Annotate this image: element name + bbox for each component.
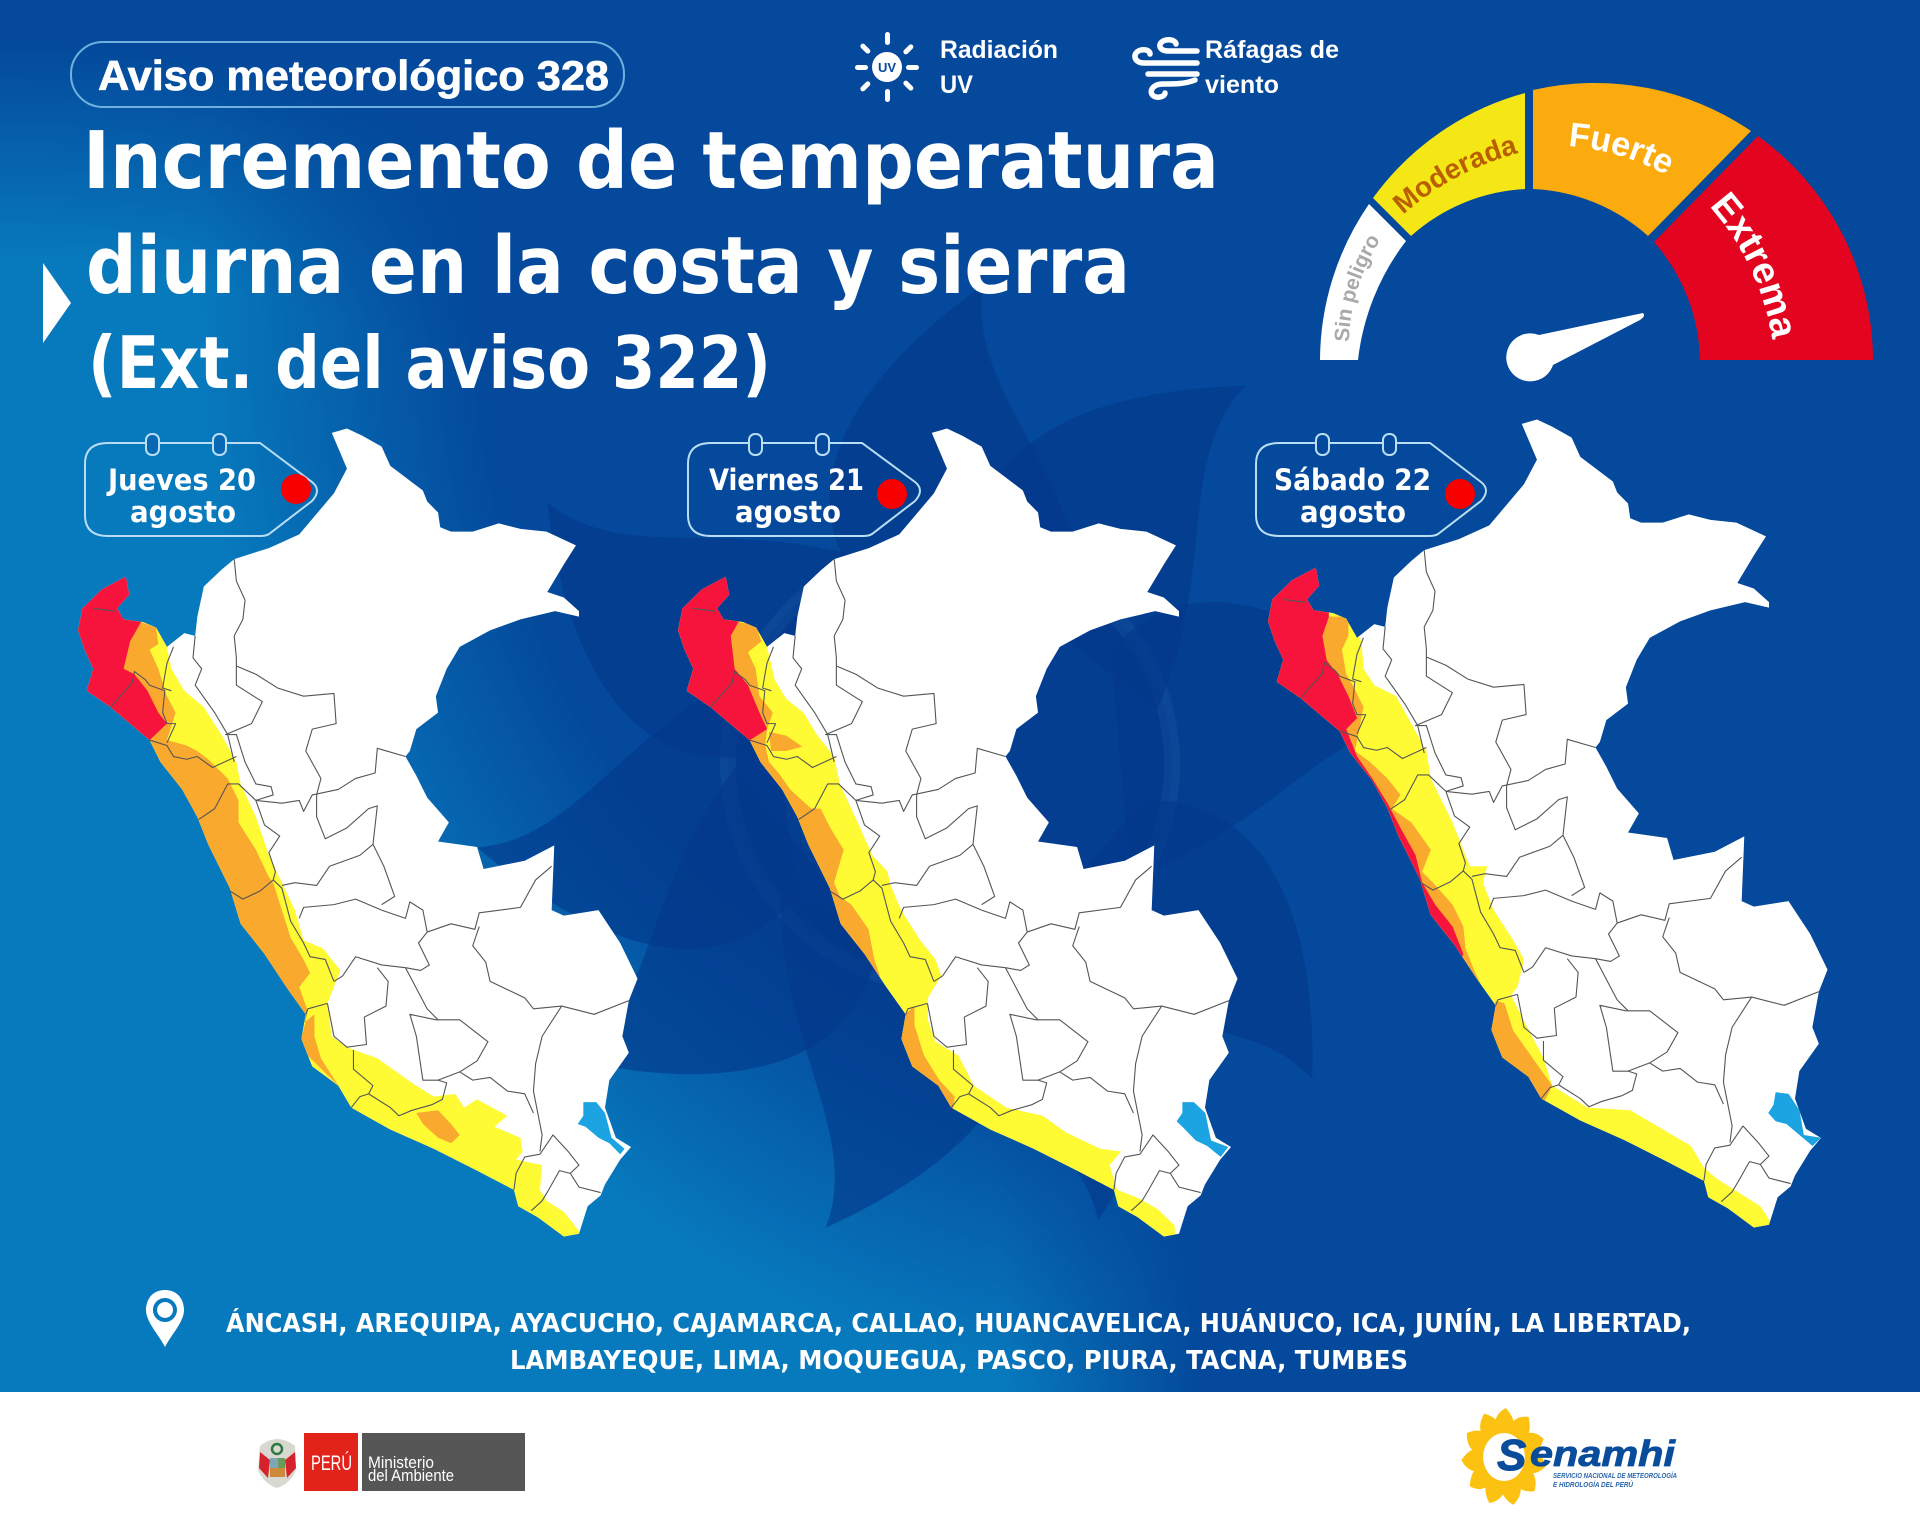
date tag: Viernes 21 agosto [688,434,920,536]
date tag: Sabado 22 agosto [1256,434,1486,536]
date tag: Sabado 22 agosto: Sábado 22 [1274,463,1431,497]
severity gauge: Sin peligro [1334,236,1378,342]
legend: UV radiation: UV [940,71,973,99]
date tag: Jueves 20 agosto [85,434,317,536]
legend: UV radiation [855,32,1058,102]
main title [83,115,1219,405]
logo: Senamhi [1461,1408,1677,1507]
logo: Ministerio del Ambiente: del Ambiente [368,1466,454,1485]
gauge needle [1506,313,1644,381]
severity gauge: Extrema [1710,191,1791,340]
icon: location pin [146,1290,184,1347]
legend: UV radiation: UV [878,60,896,75]
logo: Ministerio del Ambiente: PERÚ [311,1452,352,1475]
header pill: Aviso meteorologico 328: Aviso meteorológico 328 [98,52,609,99]
legend: wind gusts: viento [1205,71,1279,99]
date tag: Sabado 22 agosto: agosto [1300,495,1406,529]
logo: Senamhi: SERVICIO NACIONAL DE METEOROLOGÍA [1553,1471,1677,1480]
map: Friday 21 August [678,428,1238,1236]
logo: Ministerio del Ambiente [258,1433,525,1491]
severity gauge: Moderada [1392,138,1518,214]
header pill: Aviso meteorologico 328 [71,42,624,107]
legend: wind gusts: Ráfagas de [1205,36,1339,64]
severity gauge [1320,83,1873,382]
date tag: Jueves 20 agosto: agosto [130,495,236,529]
background sun emblem [455,275,1440,1264]
affected regions list: LAMBAYEQUE, LIMA, MOQUEGUA, PASCO, PIURA, TACNA, TUMBES [510,1346,1408,1376]
footer band [0,1392,1920,1532]
date tag: Viernes 21 agosto: agosto [735,495,841,529]
map: Saturday 22 August [1268,420,1828,1228]
date tag: Jueves 20 agosto: Jueves 20 [106,463,256,497]
date tag: Viernes 21 agosto: Viernes 21 [709,463,864,497]
main title: Incremento de temperatura [83,115,1219,207]
main title: diurna en la costa y sierra [86,220,1130,312]
affected regions list: ÁNCASH, AREQUIPA, AYACUCHO, CAJAMARCA, CALLAO, HUANCAVELICA, HUÁNUCO, ICA, JUNÍN, LA LIBERTAD, [226,1307,1691,1339]
logo: Ministerio del Ambiente: Ministerio [368,1453,434,1472]
severity gauge: Fuerte [1570,122,1672,172]
affected regions list [226,1307,1691,1376]
map: Thursday 20 August [78,428,638,1236]
logo: Senamhi: enamhi [1530,1433,1676,1474]
legend: wind gusts [1135,36,1339,99]
logo: Senamhi: S [1497,1431,1526,1480]
legend: UV radiation: Radiación [940,36,1058,64]
title arrow marker [43,263,71,343]
logo: Senamhi: E HIDROLOGÍA DEL PERÚ [1553,1480,1634,1489]
main title: (Ext. del aviso 322) [88,321,771,405]
